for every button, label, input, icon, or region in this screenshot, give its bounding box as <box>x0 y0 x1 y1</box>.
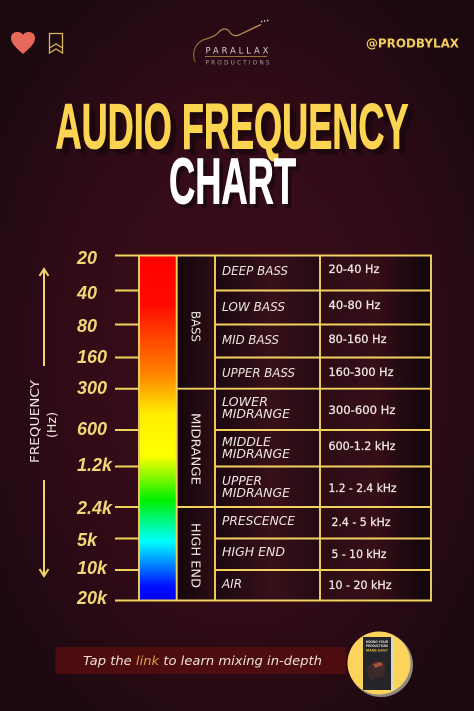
frequency ranges <box>328 262 396 592</box>
handle: @PRODBYLAX <box>366 36 459 50</box>
sub-band names: LOWER <box>222 395 268 409</box>
sub-band names: MIDRANGE <box>222 407 290 421</box>
logo underline <box>205 55 267 58</box>
frequency scale labels: 10k <box>77 558 108 578</box>
sub-band names: MIDRANGE <box>222 486 290 500</box>
title: Chart: CHART <box>173 149 300 222</box>
icon: bookmark <box>50 34 62 53</box>
book title: MIXING YOUR <box>366 640 388 644</box>
frequency ranges: 5 - 10 kHz <box>332 547 386 561</box>
frequency scale labels: 20 <box>76 248 97 268</box>
frequency scale labels: 5k <box>77 530 98 550</box>
band label: bass: BASS <box>188 311 202 342</box>
badge circle <box>348 632 410 694</box>
frequency ranges: 20-40 Hz <box>328 262 380 276</box>
sub-band names: MIDRANGE <box>222 447 290 461</box>
logo wordmark: PARALLAX <box>206 46 269 56</box>
sub-band names: LOW BASS <box>222 300 285 314</box>
table grid <box>139 256 431 600</box>
frequency ranges: 10 - 20 kHz <box>328 578 392 592</box>
sub-band names: UPPER BASS <box>222 366 295 380</box>
arrow: up <box>40 269 48 366</box>
book badge: PRODUCTIONS <box>366 644 389 648</box>
spectrum colour bar <box>140 256 176 600</box>
icon: heart <box>11 32 35 54</box>
frequency ranges: 160-300 Hz <box>328 365 394 379</box>
book cover image <box>366 660 386 680</box>
frequency scale labels: 1.2k <box>77 455 113 475</box>
frequency axis label <box>27 380 59 463</box>
frequency ranges: 2.4 - 5 kHz <box>332 515 390 529</box>
frequency scale labels: 40 <box>76 283 97 303</box>
band label: midrange: MIDRANGE <box>188 413 202 485</box>
band column background <box>177 256 215 600</box>
title: Chart: CHART <box>169 144 296 218</box>
call to action banner <box>56 647 346 674</box>
frequency scale labels: 600 <box>77 419 107 439</box>
logo subline: PRODUCTIONS <box>206 60 270 66</box>
sub-band names: PRESCENCE <box>222 514 295 528</box>
frequency ranges: 600-1.2 kHz <box>328 439 396 453</box>
sub-band names: AIR <box>221 577 242 591</box>
frequency axis label: FREQUENCY <box>27 380 42 463</box>
frequency scale labels: 80 <box>77 316 97 336</box>
sub-band names <box>221 264 295 591</box>
name column background <box>215 256 320 600</box>
title: Chart <box>169 144 300 222</box>
frequency ranges: 1.2 - 2.4 kHz <box>328 481 396 495</box>
frequency scale labels: 160 <box>77 347 107 367</box>
book badge <box>348 632 413 697</box>
logo guitar outline <box>194 24 261 62</box>
book spine <box>391 637 394 690</box>
frequency scale labels <box>76 248 113 608</box>
frequency ranges: 40-80 Hz <box>328 298 380 312</box>
frequency axis label: (Hz) <box>44 412 59 438</box>
sub-band names: DEEP BASS <box>222 264 288 278</box>
chart table <box>139 256 431 600</box>
call to action banner: Tap the link to learn mixing in-depth <box>83 653 322 668</box>
logo: Parallax Productions <box>194 20 270 66</box>
frequency scale labels: 2.4k <box>76 498 113 518</box>
logo tuning pegs <box>261 20 268 22</box>
frequency ranges: 300-600 Hz <box>328 403 396 417</box>
book cover <box>363 637 391 690</box>
range column background <box>320 256 431 600</box>
sub-band names: UPPER <box>222 474 262 488</box>
sub-band names: MID BASS <box>222 333 279 347</box>
band label: high end: HIGH END <box>188 523 202 588</box>
sub-band names: MIDDLE <box>222 435 271 449</box>
frequency scale labels: 20k <box>76 588 108 608</box>
arrow: down <box>40 480 48 576</box>
sub-band names: HIGH END <box>222 545 285 559</box>
frequency scale labels: 300 <box>77 378 107 398</box>
frequency ranges: 80-160 Hz <box>328 332 386 346</box>
scale tick marks <box>115 256 139 600</box>
badge shadow <box>349 633 413 697</box>
book badge: MADE EASY <box>366 648 388 652</box>
